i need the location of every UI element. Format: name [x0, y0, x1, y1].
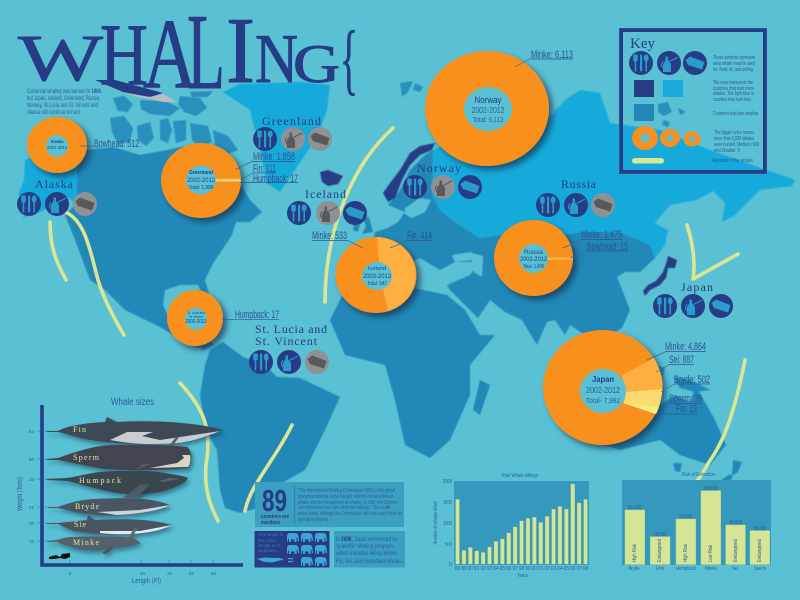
x axis labels: 03: [551, 566, 556, 572]
map: Africa: [330, 285, 495, 458]
country name: Alaska: Alaska: [35, 177, 74, 191]
y axis: 1000: [443, 521, 452, 527]
plot area: [454, 481, 589, 565]
x axis labels: 05: [564, 566, 569, 572]
intro text: but Japan, Iceland, Greenland, Russia,: [27, 96, 100, 102]
labels: Japan catches: Sei: 887: [669, 354, 694, 366]
label: Alaska bowhead: Bowhead: 512: [94, 138, 139, 150]
IWC text: intergovernmental body charged with the conservation of: [298, 494, 393, 500]
whale: Sperm: [47, 445, 191, 470]
map: North America: [65, 145, 262, 350]
axis ticks and labels: 22: [29, 505, 35, 510]
donut: Russia: Russia: [524, 249, 543, 256]
chart title: Total Whale killings: [501, 473, 538, 479]
donut: St. Lucia and St. Vincent: St. Lucia and: [188, 311, 205, 315]
map: Australia: [605, 386, 726, 465]
whale: Minke: Minke: [73, 538, 99, 547]
x axis labels: 02: [544, 566, 550, 572]
chart: total whale killings: [433, 473, 589, 579]
x axis labels: 98: [519, 566, 524, 572]
labels: Iceland catches: [312, 230, 432, 248]
labels: Japan catches: Sperm: 39: [669, 393, 702, 405]
donut: St. Lucia and St. Vincent: 2002-2012: [186, 319, 207, 325]
key: icon text: for: food, oil, and selling.: [713, 67, 754, 73]
x axis labels: 99: [525, 566, 531, 572]
country name: Japan: Japan: [681, 280, 713, 294]
donut: Norway: Total: 6,113: [472, 115, 504, 124]
x axis labels: 90: [468, 566, 473, 572]
whale: Bryde: Bryde: [75, 502, 99, 511]
donut: Greenland: [161, 143, 241, 218]
donut: Iceland: Total: 947: [367, 281, 387, 287]
whale: Sperm: Sperm: [73, 453, 100, 462]
comparison text: weight as 8: [258, 543, 280, 548]
whale: Sei: Sie: [74, 520, 86, 529]
comparison text: the same: [258, 538, 276, 543]
y axis: 2000: [443, 479, 452, 485]
risk labels: Endangered: [733, 539, 739, 562]
map: Eurasia: [352, 150, 655, 355]
key: colour text: countries that hunt more: [713, 86, 754, 92]
map: Greenland: [223, 82, 330, 192]
x axis labels: 00: [532, 566, 537, 572]
country name: Iceland: Iceland: [305, 187, 346, 201]
title: A: [143, 0, 197, 109]
label: Norway minke: Minke: 6,113: [531, 49, 573, 61]
x axis labels: 01: [538, 566, 544, 572]
donut: St. Lucia and St. Vincent: St. Vincent: [190, 315, 203, 319]
key: colour text: [713, 80, 758, 117]
risk labels: [632, 539, 763, 562]
labels: Greenland catches: [236, 151, 298, 185]
intro text: Comercial whaling was banned in 1986,: [27, 89, 102, 95]
key: circle text: The bigger cirlce means: [714, 130, 754, 136]
whale: Bryde: [48, 484, 170, 515]
donut: Iceland: [336, 237, 416, 313]
x axis labels: 95: [500, 566, 505, 572]
y axis: 1500: [443, 500, 452, 506]
axis ticks and labels: [29, 429, 217, 576]
labels: Iceland catches: Minke: 533: [312, 230, 347, 242]
donut: Norway: 2002-2012: [472, 105, 505, 115]
IWC text: sion introduced zero catch limits for whaling. " This is still: [298, 505, 390, 511]
country name: St. Lucia and St. Vincent: St. Lucia and: [255, 322, 327, 336]
label: Alaska bowhead: [80, 138, 139, 155]
donut: Iceland: 2003-2013: [363, 273, 391, 280]
map: Tasmania and New Zealand: [673, 460, 742, 484]
panel: 2006 Japan note: Fin, Sei, and Humpback whales.: [336, 558, 403, 565]
donut: Alaska: [27, 117, 87, 173]
icons: Alaska: [17, 192, 97, 216]
whale: Fin: [47, 417, 223, 447]
donut: Japan: [543, 330, 663, 445]
map: Iceland: [320, 170, 343, 186]
label: St. Lucia humpback: Humpback: 17: [235, 309, 279, 321]
map: Indonesia and Papua: [610, 350, 710, 399]
species labels: Bryde: [628, 566, 640, 572]
panel: whale weight comparison: [254, 531, 330, 568]
icon: whale under title: [95, 80, 178, 102]
key: colour text: whales. The light blue is: [713, 91, 754, 97]
key: colour text: The navy represents the: [713, 80, 753, 86]
caption: [261, 514, 289, 526]
risk labels: High Risk: [683, 544, 689, 562]
value labels: 30,000: [754, 526, 766, 532]
key: colour text: counties that hunt less.: [713, 97, 752, 103]
x axis labels: 88: [455, 566, 460, 572]
whale: Minke: [47, 536, 141, 554]
IWC text: [298, 488, 402, 523]
labels: Iceland catches: Fin: 414: [407, 230, 432, 242]
title: H: [100, 7, 148, 104]
comparison text: One whale is: [258, 532, 283, 537]
panel: 2006 Japan note: 'scientific' whaling program,: [336, 543, 394, 550]
axis ticks and labels: 65: [211, 571, 217, 576]
intro text: [27, 89, 102, 116]
map: Alaska: [18, 150, 77, 218]
icons: Japan: [653, 294, 733, 318]
map: arctic islands: [110, 81, 686, 155]
key: circle text: were hunted. Medium: 600: [714, 142, 759, 148]
key: circle text: [714, 130, 759, 154]
panel: 2006 Japan note: In 2006, Japan announced its: [336, 536, 397, 543]
x axis labels: 92: [480, 566, 486, 572]
value labels: 40,000: [729, 520, 742, 526]
x axis labels: 97: [512, 566, 518, 572]
x axis labels: [455, 566, 588, 572]
intro text: Norway, St.Lucia and St. Vincent and: [27, 103, 98, 109]
panel: 2006 Japan note: which includes killing Minke,: [335, 550, 398, 557]
axis ticks and labels: 45: [167, 571, 173, 576]
icons: St. Lucia and St. Vincent: [249, 350, 329, 374]
whale: Humpback: [47, 471, 188, 494]
IWC text: "The International Whaling Commission (IWC) is the global: [298, 488, 395, 494]
labels: Japan catches: Bryde: 502: [674, 374, 710, 386]
risk labels: Endangered: [757, 539, 763, 562]
intro text: Alaska still continue to hunt.: [27, 110, 81, 116]
IWC text: active today, although the Commission still sets catch limits for: [298, 511, 402, 517]
value labels: 50,000: [628, 505, 641, 511]
value labels: 60,000: [679, 514, 692, 520]
key: colour text: Countries that ban whaling: [713, 111, 758, 117]
axis ticks and labels: 52: [189, 571, 195, 576]
axis title: length: Length (Ft): [132, 576, 161, 585]
title: N: [255, 21, 298, 98]
panel: 89 member countries: [255, 482, 404, 527]
labels: Greenland catches: Minke: 1,858: [253, 151, 295, 163]
value labels: 70,000: [654, 532, 666, 538]
x axis labels: 93: [487, 566, 492, 572]
axis ticks and labels: 33: [29, 477, 35, 482]
comparison text: elephants.: [258, 548, 278, 553]
donut: Norway: [425, 51, 549, 166]
chart: risk of extinction: [622, 472, 771, 572]
risk labels: Endangered: [657, 539, 663, 562]
bars: [625, 491, 770, 564]
icon: diver: [49, 553, 70, 559]
donut: Japan: Japan: [592, 374, 614, 384]
donut: Alaska: 2002-2012: [47, 145, 67, 150]
text: {: [340, 15, 358, 102]
y axis: Number of whales killed: [433, 502, 439, 544]
IWC text: aboriginal whaling.: [298, 517, 329, 523]
chart axes: [42, 405, 243, 565]
species labels: Humpback: [676, 566, 696, 572]
donut: Russia: 2002-2012: [520, 257, 548, 263]
country name: Russia: Russia: [561, 177, 597, 191]
key: colour swatches: [634, 80, 683, 121]
labels: Greenland catches: Fin: 111: [253, 163, 276, 175]
axis title: weight: Weight (Tons): [15, 477, 24, 511]
map: inland seas: [405, 198, 483, 277]
map: British Isles: [353, 217, 373, 234]
value labels: 200,000: [703, 486, 718, 492]
country name: Greenland: Greenland: [262, 114, 321, 128]
IWC text: whales and the management of whaling. In 1986, the Commis-: [298, 500, 398, 506]
title: W: [18, 22, 104, 95]
donut: Greenland: Greenland: [189, 170, 213, 176]
donut: Russia: [494, 220, 573, 296]
world map: [18, 81, 795, 513]
icons: Norway: [403, 175, 482, 199]
axis ticks and labels: 6: [69, 571, 72, 576]
caption: countries are: [261, 514, 289, 520]
y axis: 500: [445, 542, 452, 548]
whale: Sei: [47, 515, 172, 539]
panel: 2006 Japan note: [334, 531, 405, 568]
donut: Japan: Total- 7,982: [586, 398, 620, 405]
labels: Russia catches: [563, 229, 628, 258]
chart title: Risk of Extinction: [682, 472, 715, 478]
axis ticks and labels: 20: [29, 521, 35, 526]
x axis title: Years: [517, 573, 528, 579]
donut: St. Lucia and St. Vincent: [167, 290, 223, 346]
whale: Humpback: Humpack: [79, 476, 121, 485]
donut: Japan: 2002-2012: [586, 386, 620, 395]
value labels: [628, 486, 766, 538]
map: Norway: [383, 143, 435, 202]
key: icon text: what whale meat is used: [713, 61, 755, 67]
x axis labels: 04: [557, 566, 563, 572]
labels: Russia catches: Bowhead: 15: [587, 241, 628, 253]
donut: Norway: Norway: [474, 95, 502, 105]
comparison text: [258, 532, 283, 553]
labels: Greenland catches: Humpback: 17: [253, 173, 298, 185]
key: use icons: [629, 51, 707, 75]
axis ticks and labels: 10: [29, 539, 35, 544]
key: migration text: Migration of the whales: [712, 158, 753, 164]
key: migration swatch: [632, 158, 664, 164]
key: icon text: These symbols represent: [713, 55, 755, 61]
donut: Greenland: 2002-2012: [187, 177, 215, 184]
map: Madagascar: [473, 380, 490, 415]
species labels: [628, 566, 766, 572]
whale silhouette and equals: [257, 558, 293, 562]
key: circle sizes: [632, 126, 700, 150]
species labels: Minke: [705, 566, 717, 572]
big number: 89: [262, 483, 287, 518]
key heading: Key: [630, 36, 655, 52]
country name: Norway: Norway: [417, 161, 461, 175]
donut: Alaska: Alaska: [50, 139, 64, 144]
donut: Greenland: Total: 1,986: [188, 185, 214, 191]
chart: whale sizes: [15, 397, 243, 585]
x axis labels: 08: [583, 566, 588, 572]
key: circle text: and Smaller: 5: [714, 148, 740, 154]
chart heading: Whale sizes: [111, 397, 154, 408]
icons: Russia: [536, 193, 615, 217]
key: icon text: [713, 55, 755, 73]
risk labels: Low Risk: [708, 545, 714, 562]
x axis labels: 07: [576, 566, 582, 572]
map: Russia: [432, 90, 795, 258]
bars: [456, 484, 587, 564]
plot area: [622, 480, 771, 565]
risk labels: High Risk: [632, 544, 638, 562]
x axis labels: 06: [570, 566, 576, 572]
migration lines: [50, 128, 745, 521]
country name: St. Lucia and St. Vincent: St. Vincent: [255, 334, 318, 348]
label: Norway minke: [515, 49, 573, 67]
axis ticks and labels: 30: [140, 571, 146, 576]
whale: Fin: Fin: [73, 425, 86, 434]
y axis: 0: [449, 562, 452, 568]
labels: Japan catches: [647, 341, 710, 415]
axis ticks and labels: 62: [29, 429, 35, 434]
donut: Russia: Total: 1,490: [523, 264, 544, 270]
donut: Iceland: Iceland: [368, 266, 386, 272]
labels: Russia catches: Minke: 1,475: [581, 229, 622, 241]
species labels: Finn: [656, 566, 664, 572]
icons: Greenland: [253, 127, 332, 151]
icons: Iceland: [287, 201, 367, 225]
axis ticks and labels: 50: [29, 457, 35, 462]
labels: Japan catches: Fin: 19: [676, 403, 697, 415]
species labels: Sperm: [754, 566, 766, 572]
x axis labels: 94: [493, 566, 499, 572]
title: G: [293, 34, 340, 94]
elephants: [287, 533, 327, 566]
x axis labels: 91: [474, 566, 480, 572]
caption: members: [261, 520, 280, 526]
labels: Japan catches: Minke: 4,864: [665, 341, 706, 353]
key: circle text: more than 2,000 whales: [714, 136, 754, 142]
panel: key: [620, 28, 766, 174]
x axis labels: 96: [506, 566, 512, 572]
title: [18, 0, 358, 112]
map: South America: [200, 342, 340, 513]
species labels: Sei: [732, 566, 738, 572]
label: St. Lucia humpback: [222, 309, 279, 321]
x axis labels: 89: [461, 566, 467, 572]
map: Japan: [643, 256, 677, 296]
title: I: [226, 0, 255, 103]
y axis: [433, 479, 452, 568]
